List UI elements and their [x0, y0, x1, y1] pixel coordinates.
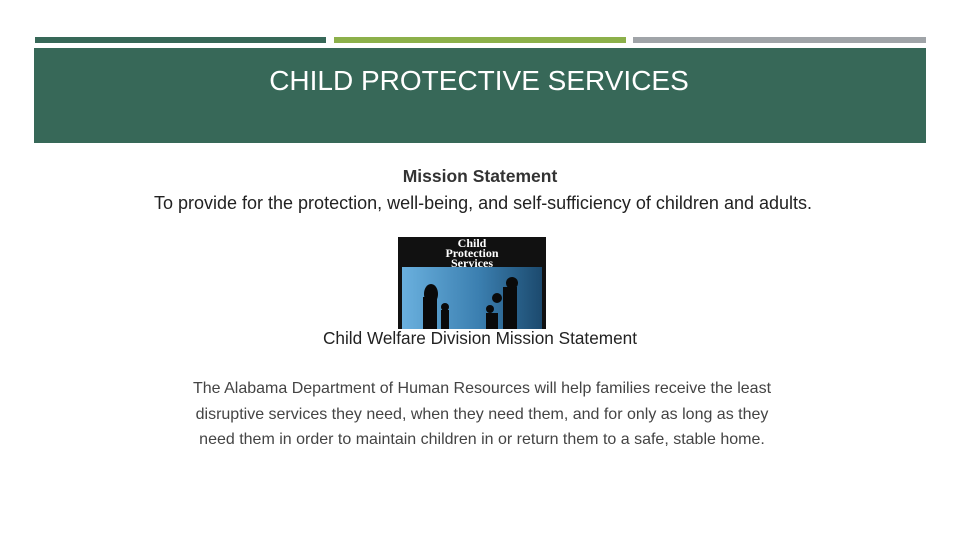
- image: child protection services: [398, 237, 546, 329]
- accent bar: light green: [334, 37, 626, 43]
- image: child protection services: Services: [451, 256, 493, 270]
- header banner: [34, 48, 926, 143]
- accent bar: dark green: [35, 37, 326, 43]
- body text: disruptive services they need, when they need them, and for only as long as they: [196, 406, 768, 422]
- body text: The Alabama Department of Human Resources will help families receive the least: [193, 380, 771, 397]
- mission heading: Mission Statement: [403, 166, 557, 186]
- subheading: Child Welfare Division Mission Statement: [323, 328, 637, 348]
- title: CHILD PROTECTIVE SERVICES: [269, 65, 689, 96]
- body text: [193, 380, 771, 448]
- accent bar: gray: [633, 37, 926, 43]
- image: child protection services: Protection: [445, 246, 499, 260]
- mission text: To provide for the protection, well-being, and self-sufficiency of children and adults.: [154, 193, 812, 213]
- body text: need them in order to maintain children in or return them to a safe, stable home.: [199, 431, 765, 448]
